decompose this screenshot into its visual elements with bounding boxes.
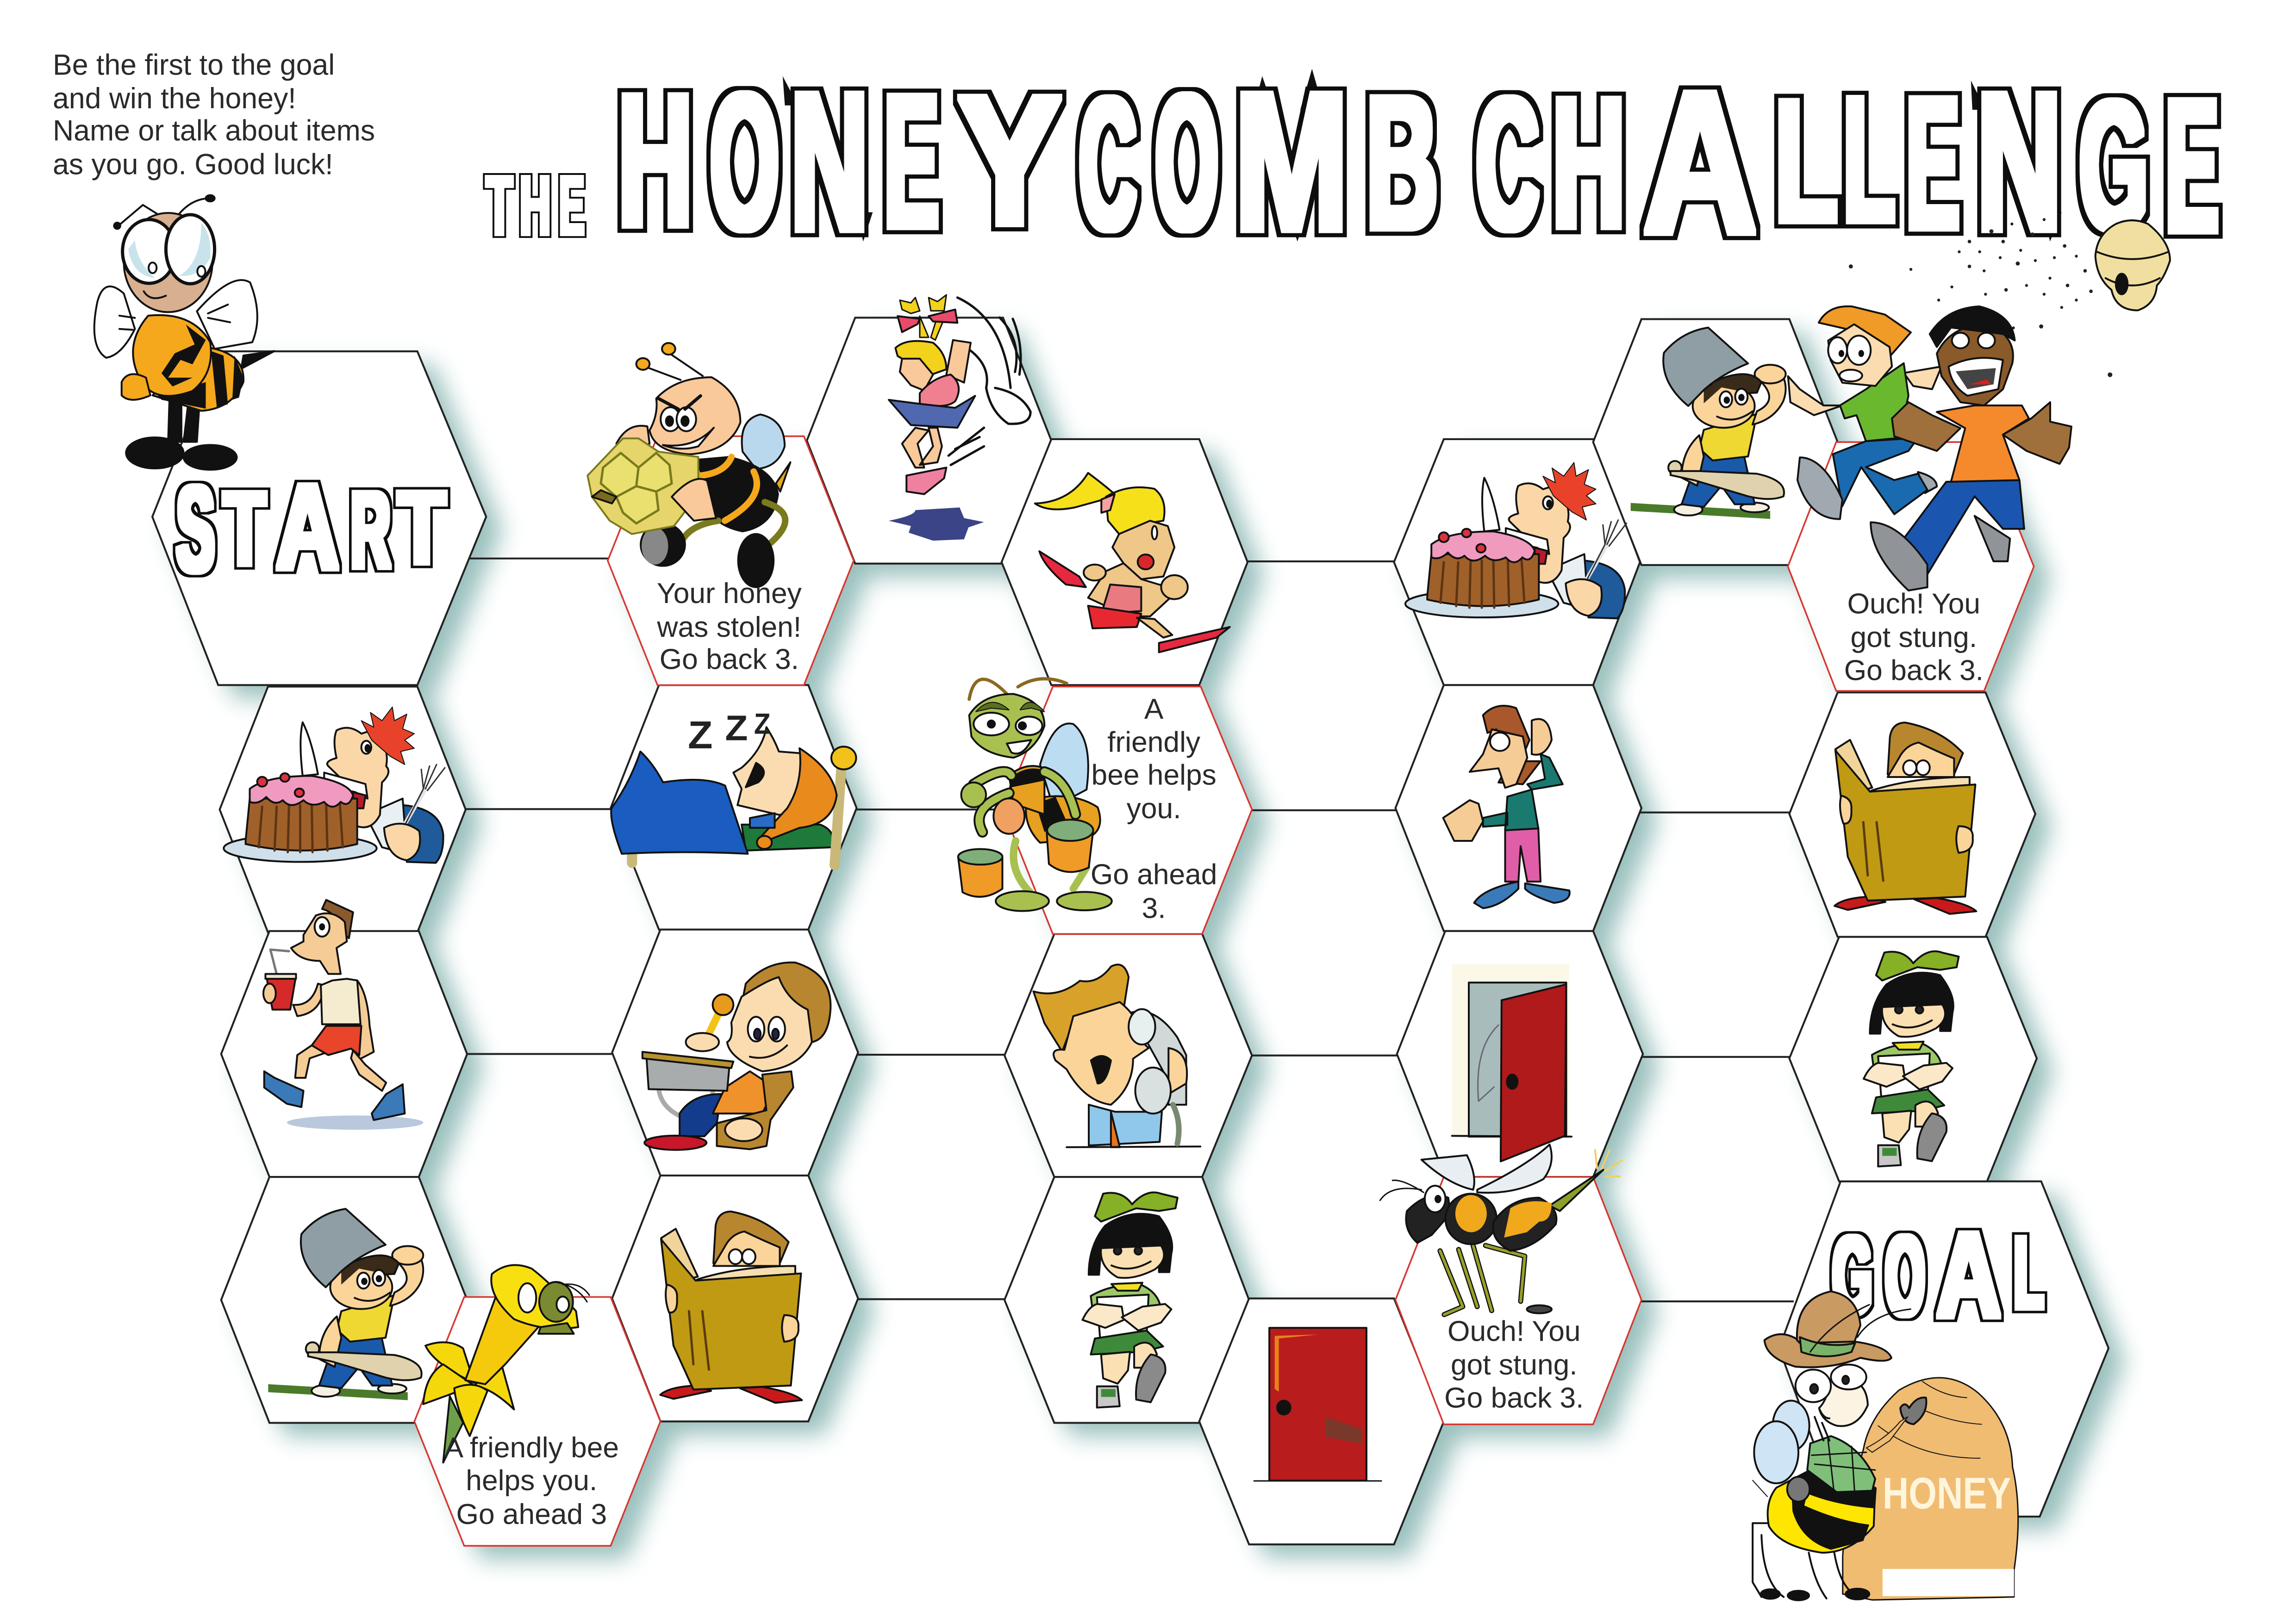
cell: start: T: [223, 470, 266, 586]
text: friendly bee helps you, bottom: A friendly bee: [444, 1432, 619, 1464]
icon: sleeper in bed: Z: [754, 708, 771, 740]
title: the honeycomb challenge: B: [1366, 56, 1438, 269]
title: the honeycomb challenge: T: [486, 159, 512, 252]
instructions text: [53, 49, 375, 180]
instructions text: as you go. Good luck!: [53, 148, 333, 180]
text: friendly bee helps you, bottom: helps you.: [466, 1465, 597, 1497]
text: ouch you got stung, top: Ouch! You: [1847, 588, 1980, 620]
icon: running boy with orange shirt: [1871, 306, 2071, 591]
penalty and bonus cells outlined in red: [414, 436, 2034, 1546]
text: ouch you got stung, bottom: got stung.: [1451, 1349, 1578, 1381]
icon: daffodil with bee: [423, 1265, 589, 1462]
icon: boy reading book, middle: [660, 1212, 802, 1403]
title: the honeycomb challenge: N: [791, 51, 868, 272]
title: the honeycomb challenge: O: [710, 54, 779, 269]
text: friendly bee helps you, centre: bee helps: [1092, 759, 1217, 791]
cell: goal: [1779, 1181, 2109, 1517]
connecting lines between cells: [466, 559, 1794, 1301]
text: friendly bee helps you, centre: friendly: [1107, 726, 1201, 758]
icon: hive top right: [2096, 220, 2170, 311]
text: friendly bee helps you, centre: A: [1144, 693, 1164, 725]
title: the honeycomb challenge: L: [1844, 60, 1895, 259]
icon: puzzled man: [1443, 706, 1570, 908]
bee swarm specks: [1849, 218, 2112, 377]
text: friendly bee helps you, centre: you.: [1127, 793, 1181, 825]
icon: wasp: [1380, 1144, 1622, 1315]
text: ouch you got stung, bottom: Go back 3.: [1444, 1382, 1584, 1414]
text: ouch you got stung, top: got stung.: [1851, 622, 1977, 653]
title: the honeycomb challenge: Y: [958, 57, 1061, 263]
icon: boy writing at desk: [643, 963, 830, 1150]
text: your honey was stolen: Your honey: [657, 578, 802, 609]
text: your honey was stolen: Go back 3.: [660, 644, 799, 676]
instructions text: and win the honey!: [53, 82, 296, 115]
board cells: [220, 317, 2037, 1544]
cell: start: S: [176, 461, 214, 597]
text: friendly bee helps you, bottom: Go ahead 3: [456, 1499, 607, 1530]
icon: explorer bee with hive: HONEY: [1883, 1468, 2011, 1518]
cell: start: T: [398, 470, 446, 585]
icon: man on telephone: [1033, 964, 1200, 1147]
icon: thief bee with honeycomb: [587, 343, 791, 587]
title: the honeycomb challenge: H: [1552, 59, 1625, 267]
title: the honeycomb challenge: E: [1907, 58, 1959, 268]
icon: sleeper in bed: Z: [725, 708, 748, 748]
icon: man drinking soda: [263, 900, 424, 1130]
title: the honeycomb challenge: H: [618, 55, 693, 266]
title: the honeycomb challenge: H: [520, 159, 550, 252]
text: your honey was stolen: was stolen!: [657, 611, 801, 643]
cell: goal: A: [1936, 1206, 2001, 1343]
icon: cake eater, right: [1405, 463, 1627, 618]
icon: open red door: [1452, 964, 1572, 1162]
text: friendly bee helps you, centre: Go ahead: [1091, 859, 1217, 891]
title: the honeycomb challenge: [486, 49, 2218, 276]
text: E: [2165, 60, 2218, 272]
title: the honeycomb challenge: A: [1643, 49, 1757, 276]
icon: cake eater, left: [224, 707, 445, 863]
title: the honeycomb challenge: E: [885, 55, 939, 267]
cell: goal: G: [1833, 1214, 1872, 1337]
icon: sleeper in bed: [611, 708, 856, 865]
text: ouch you got stung, bottom: Ouch! You: [1447, 1315, 1581, 1347]
title: the honeycomb challenge: L: [1775, 63, 1838, 258]
icon: start bee: [94, 195, 275, 470]
cell: start: [152, 351, 486, 685]
instructions text: Name or talk about items: [53, 115, 375, 147]
title: the honeycomb challenge: M: [1235, 51, 1348, 272]
icon: girl with papers, right: [1864, 951, 1959, 1167]
title: the honeycomb challenge: O: [1155, 55, 1218, 269]
text: friendly bee helps you, centre: [1091, 693, 1217, 924]
icon: boy reading book, right: [1834, 722, 1976, 914]
text: your honey was stolen: [657, 578, 802, 676]
icon: girl with papers, middle: [1082, 1192, 1178, 1408]
cell: start: R: [351, 469, 390, 591]
text: ouch you got stung, top: [1844, 588, 1984, 686]
instructions text: Be the first to the goal: [53, 49, 335, 81]
icon: sleeper in bed: Z: [688, 714, 713, 757]
icon: running boy with red hair: [1788, 306, 1941, 519]
icon: girl skipping rope: [889, 295, 1030, 541]
text: ouch you got stung, top: Go back 3.: [1844, 654, 1984, 686]
icon: explorer bee with hive: [1753, 1291, 2018, 1600]
icon: friendly bee with buckets: [958, 679, 1112, 911]
title: the honeycomb challenge: G: [2079, 62, 2148, 267]
title: the honeycomb challenge: C: [1476, 58, 1539, 268]
text: ouch you got stung, bottom: [1444, 1315, 1584, 1414]
text: friendly bee helps you, bottom: [444, 1432, 619, 1530]
icon: closed red door: [1254, 1328, 1381, 1481]
board shadows: [152, 317, 2109, 1546]
icon: boy with bucket, top: [1631, 328, 1786, 519]
title: the honeycomb challenge: E: [559, 159, 584, 252]
title: the honeycomb challenge: N: [1977, 51, 2062, 272]
cell: goal: L: [2014, 1215, 2043, 1330]
text: friendly bee helps you, centre: 3.: [1142, 892, 1166, 924]
icon: girl running with bats: [1035, 473, 1230, 652]
cell: goal: O: [1885, 1213, 1925, 1339]
title: the honeycomb challenge: C: [1079, 58, 1136, 268]
icon: boy with bucket, left: [268, 1209, 423, 1400]
cell: start: A: [276, 459, 339, 595]
